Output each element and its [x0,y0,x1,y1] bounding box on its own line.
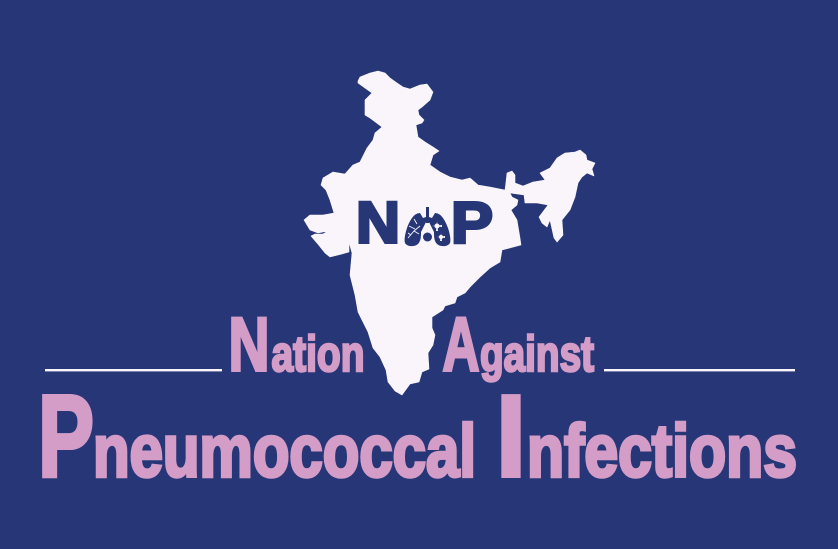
branches in left lung [408,219,420,238]
heading: Nation: ation [272,326,364,382]
logo letter N: N [356,190,400,256]
heading: Pneumococcal Infections: neumococcal [93,409,476,492]
left rule [45,369,222,371]
NAP logo [356,190,493,256]
heading: Nation [228,302,364,388]
heading: Pneumococcal Infections: P [38,371,94,501]
heading: Against: A [442,302,480,388]
heading: Against [442,302,594,388]
map of India [304,71,595,395]
left lung [405,213,426,246]
trachea [426,207,429,223]
lung centre dot [423,232,432,242]
heading: Pneumococcal Infections [38,371,797,501]
heading: Against: gainst [480,326,594,382]
germs in right lung [432,221,445,241]
heading: Nation: N [228,302,270,388]
right lung [429,213,450,246]
logo letter P: P [451,190,493,256]
icon: lungs [405,207,450,246]
heading: Pneumococcal Infections: I [496,371,526,501]
right rule [604,369,795,371]
